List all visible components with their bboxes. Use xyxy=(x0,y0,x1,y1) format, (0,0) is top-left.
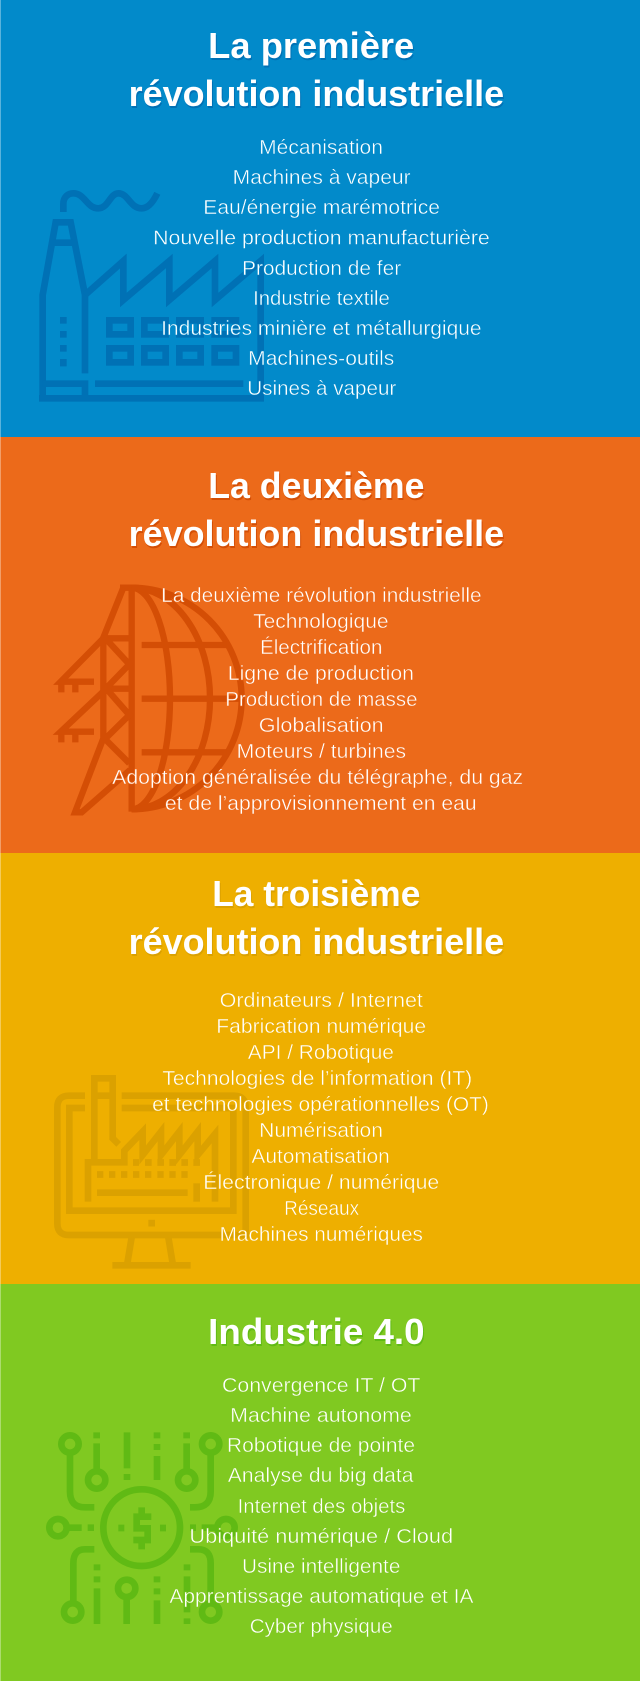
text block: second revolution features xyxy=(112,585,523,815)
panel: industry 4.0 xyxy=(0,1284,640,1681)
text block: first revolution features: Production de fer xyxy=(242,258,402,280)
panel: second industrial revolution xyxy=(0,437,640,853)
text block: third revolution features: Réseaux xyxy=(284,1198,359,1220)
text block: industry 4.0 features: Robotique de pointe xyxy=(227,1435,415,1457)
text block: industry 4.0 features: Apprentissage automatique et IA xyxy=(169,1586,474,1608)
text block: industry 4.0 features: Cyber physique xyxy=(250,1616,393,1638)
text block: second revolution features: et de l’approvisionnement en eau xyxy=(165,793,477,815)
icon: pylon and globe xyxy=(61,588,242,812)
text block: third revolution features: Machines numériques xyxy=(220,1224,423,1246)
heading: la deuxième révolution industrielle: révolution industrielle xyxy=(129,513,504,554)
heading: la première révolution industrielle: révolution industrielle xyxy=(129,73,504,114)
text block: first revolution features xyxy=(153,137,490,400)
heading: la première révolution industrielle xyxy=(129,25,504,114)
text block: second revolution features: Technologique xyxy=(253,611,389,633)
panel: third industrial revolution xyxy=(0,853,640,1284)
text block: second revolution features: La deuxième révolution industrielle xyxy=(161,585,482,607)
icon: factory with smoke xyxy=(39,193,264,398)
text block: third revolution features: Électronique / numérique xyxy=(203,1171,439,1194)
text block: third revolution features: API / Robotique xyxy=(248,1042,394,1064)
text block: first revolution features: Mécanisation xyxy=(259,137,383,159)
text block: second revolution features: Ligne de production xyxy=(228,663,414,685)
heading: la première révolution industrielle: La première xyxy=(208,25,414,66)
heading: la troisième révolution industrielle: révolution industrielle xyxy=(129,921,504,962)
panel background: blue xyxy=(0,0,640,437)
text block: third revolution features: Automatisation xyxy=(251,1146,390,1168)
heading: industrie 4.0: Industrie 4.0 xyxy=(208,1311,424,1352)
text block: industry 4.0 features: Ubiquité numérique / Cloud xyxy=(189,1526,453,1548)
text block: industry 4.0 features: Usine intelligente xyxy=(242,1556,400,1578)
text block: third revolution features: Fabrication numérique xyxy=(216,1016,426,1038)
text block: third revolution features xyxy=(152,990,489,1246)
text block: third revolution features: et technologies opérationnelles (OT) xyxy=(152,1094,489,1116)
panel: first industrial revolution xyxy=(0,0,640,437)
text block: first revolution features: Industrie textile xyxy=(253,288,390,310)
text block: second revolution features: Adoption généralisée du télégraphe, du gaz xyxy=(112,767,523,789)
panel background: green xyxy=(0,1284,640,1681)
text block: industry 4.0 features: Analyse du big data xyxy=(228,1465,414,1487)
text block: industry 4.0 features: Machine autonome xyxy=(230,1405,412,1427)
heading: la deuxième révolution industrielle: La deuxième xyxy=(208,465,424,506)
text block: second revolution features: Globalisation xyxy=(259,715,384,737)
heading: la deuxième révolution industrielle xyxy=(129,465,504,554)
icon: factory on computer monitor xyxy=(57,1078,246,1265)
heading: la troisième révolution industrielle xyxy=(129,873,504,962)
text block: third revolution features: Ordinateurs / Internet xyxy=(220,990,423,1012)
panel background: yellow xyxy=(0,853,640,1284)
text block: industry 4.0 features xyxy=(169,1375,474,1638)
text block: industry 4.0 features: Internet des objets xyxy=(238,1496,405,1518)
text block: first revolution features: Usines à vapeur xyxy=(247,378,397,400)
text block: first revolution features: Nouvelle production manufacturière xyxy=(153,227,490,249)
text block: third revolution features: Numérisation xyxy=(259,1120,383,1142)
text block: first revolution features: Machines-outils xyxy=(248,348,394,370)
panel background: orange xyxy=(0,437,640,853)
text block: first revolution features: Industries minière et métallurgique xyxy=(161,318,482,340)
icon: circuit with dollar coin xyxy=(49,1432,235,1624)
text block: first revolution features: Machines à vapeur xyxy=(233,167,411,189)
text block: second revolution features: Production de masse xyxy=(225,689,418,711)
text block: second revolution features: Électrification xyxy=(260,636,382,659)
text block: first revolution features: Eau/énergie marémotrice xyxy=(203,197,440,219)
text block: third revolution features: Technologies de l’information (IT) xyxy=(162,1068,472,1090)
text block: second revolution features: Moteurs / turbines xyxy=(237,741,406,763)
text block: industry 4.0 features: Convergence IT / OT xyxy=(222,1375,420,1397)
heading: la troisième révolution industrielle: La troisième xyxy=(212,873,420,914)
